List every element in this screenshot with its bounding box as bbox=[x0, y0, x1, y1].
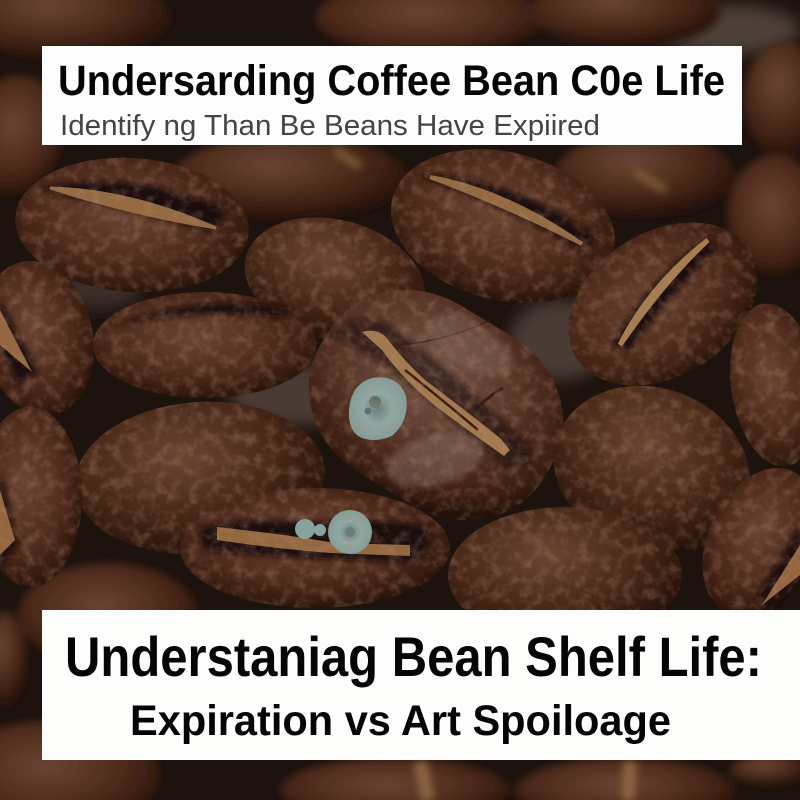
bean: lower left smooth bbox=[70, 393, 330, 563]
bean: lower right smooth bbox=[530, 359, 774, 581]
bean: upper left bbox=[11, 150, 253, 300]
soft tabletop shadow tone bbox=[60, 5, 800, 425]
bean: bottom centre right bbox=[448, 507, 682, 643]
bean: far left bbox=[0, 250, 108, 426]
bean: upper right bbox=[374, 127, 632, 325]
main beans bbox=[0, 127, 800, 643]
title: Undersarding Coffee Bean C0e Life bbox=[58, 57, 725, 105]
bean: lower right edge bbox=[680, 449, 800, 635]
footer panel bbox=[42, 610, 800, 760]
bean: right with orange crease bbox=[538, 189, 788, 419]
bean: bottom centre with mould bbox=[180, 488, 450, 608]
surface cracks and highlights bbox=[400, 320, 503, 410]
bean: far right bbox=[720, 298, 800, 472]
bean: left middle bbox=[93, 292, 317, 398]
header panel bbox=[42, 46, 742, 145]
bean: central with mould bbox=[274, 254, 598, 556]
subtitle: Identify ng Than Be Beans Have Expiired bbox=[60, 110, 600, 142]
footer subtitle: Expiration vs Art Spoiloage bbox=[130, 697, 671, 745]
mould patches on lower bean bbox=[295, 510, 372, 554]
bean: left edge bbox=[0, 407, 82, 587]
mould patch on central bean bbox=[349, 377, 407, 440]
bean: smooth centre top bbox=[231, 198, 439, 362]
